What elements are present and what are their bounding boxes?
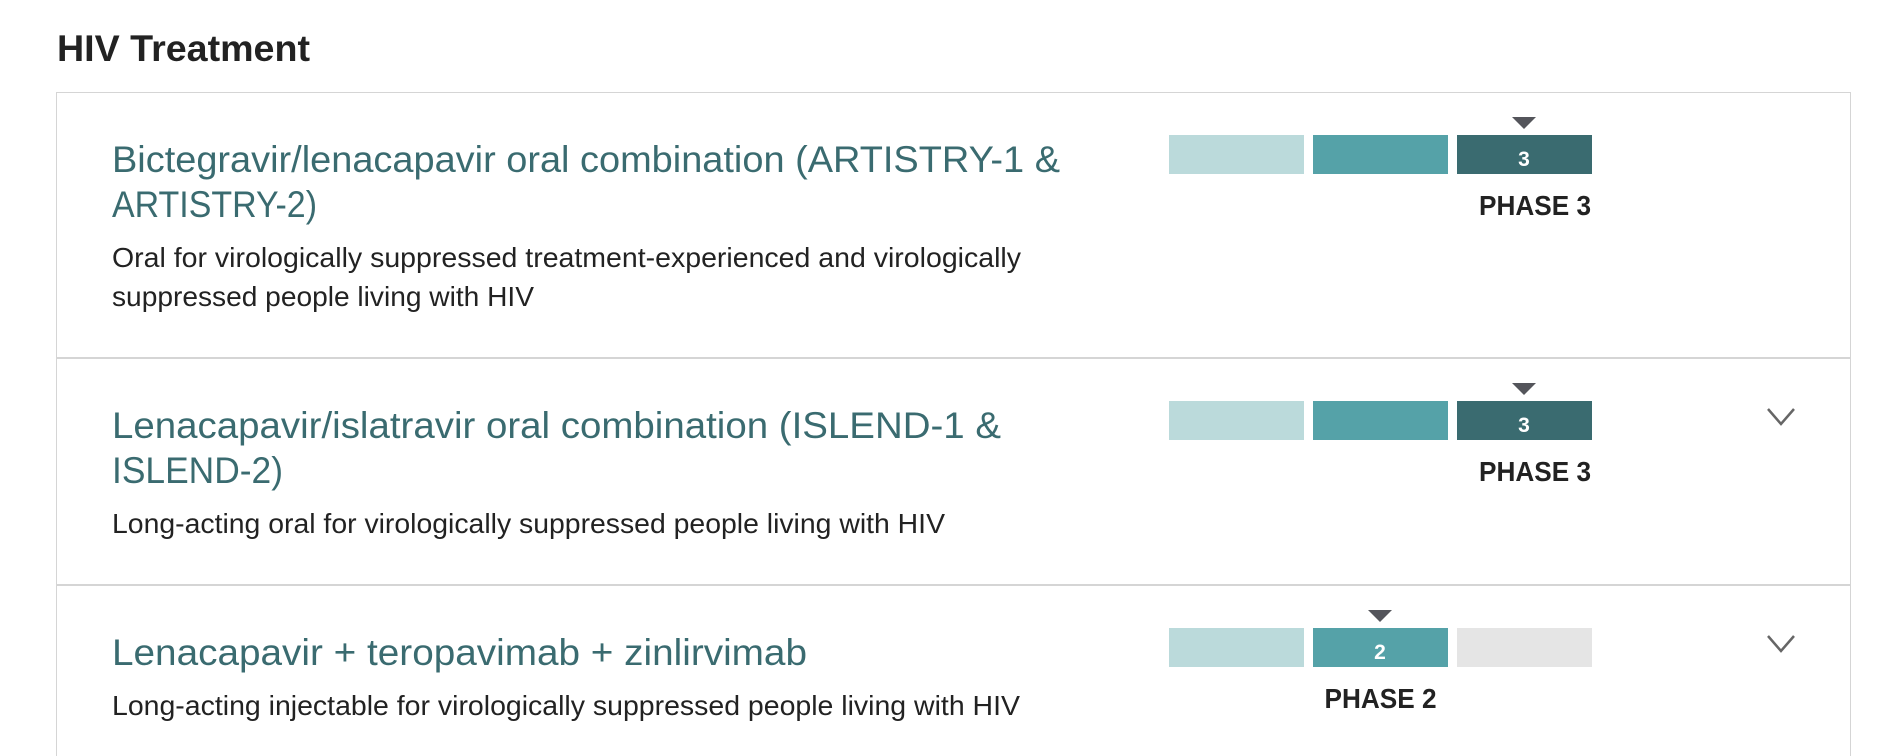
icon: row 3 chevron <box>1768 636 1794 651</box>
row 2 title: Lenacapavir/islatravir oral combination (ISLEND-1 & <box>112 405 1001 446</box>
row 2 phase indicator: PHASE 3 <box>1479 456 1591 487</box>
row 1 title: Bictegravir/lenacapavir oral combination (ARTISTRY-1 & <box>112 139 1060 180</box>
row 1 description <box>112 242 1021 312</box>
row 1 phase indicator <box>1169 117 1592 221</box>
row 1 description: Oral for virologically suppressed treatment-experienced and virologically <box>112 242 1021 273</box>
row 2 title: ISLEND-2) <box>112 450 283 491</box>
row 1 phase indicator: 3 <box>1518 148 1530 171</box>
icon: row 2 chevron <box>1768 409 1794 424</box>
row 2 phase indicator: 3 <box>1518 414 1530 437</box>
panel: row 3 Lenacapavir + teropavimab + zinlirvimab <box>112 610 1794 721</box>
row 2 description: Long-acting oral for virologically suppressed people living with HIV <box>112 508 945 539</box>
row 3 phase indicator <box>1169 610 1592 714</box>
heading: HIV Treatment: HIV Treatment <box>57 28 310 69</box>
panel: row 1 Bictegravir/lenacapavir <box>112 117 1592 312</box>
row 1 title <box>112 139 1060 225</box>
row 3 phase indicator: 2 <box>1374 641 1386 664</box>
row 3 title: Lenacapavir + teropavimab + zinlirvimab <box>112 632 807 673</box>
row 1 title: ARTISTRY-2) <box>112 184 317 225</box>
row 2 title <box>112 405 1001 491</box>
row 1 description: suppressed people living with HIV <box>112 281 534 312</box>
row 1 phase indicator: PHASE 3 <box>1479 190 1591 221</box>
row 2 phase indicator <box>1169 383 1592 487</box>
row 3 phase indicator: PHASE 2 <box>1324 683 1436 714</box>
panel: row 2 Lenacapavir/islatravir <box>112 383 1794 539</box>
row 3 description: Long-acting injectable for virologically suppressed people living with HIV <box>112 690 1020 721</box>
